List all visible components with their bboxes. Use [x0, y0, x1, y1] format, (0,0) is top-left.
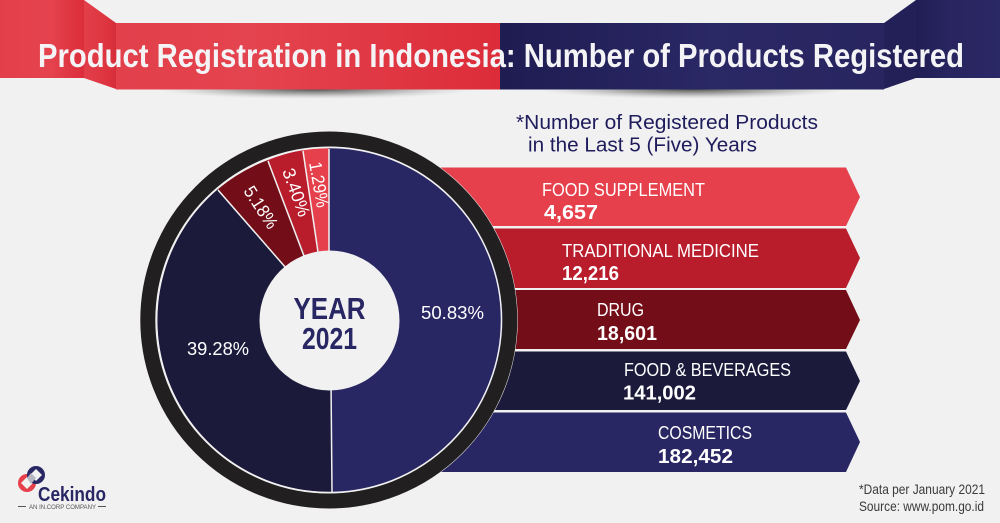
arrow: drug: 18,601 [597, 323, 657, 345]
logo mark [18, 466, 45, 492]
arrow: food supplement: 4,657 [544, 202, 598, 224]
arrow: food and beverages: FOOD & BEVERAGES [624, 360, 791, 380]
percentage labels: 5.18% [240, 182, 282, 233]
logo: Cekindo [38, 484, 106, 506]
centre label: YEAR [294, 291, 366, 326]
arrow: cosmetics [400, 412, 860, 472]
arrow: food and beverages: 141,002 [623, 382, 696, 404]
arrow: food and beverages [400, 352, 860, 410]
arrow: traditional medicine: TRADITIONAL MEDICINE [562, 241, 759, 261]
banner shadows [155, 79, 847, 99]
centre label: 2021 [302, 321, 357, 356]
slice: traditional medicine [268, 150, 330, 320]
subtitle: *Number of Registered Products [516, 111, 818, 134]
logo [18, 466, 106, 511]
arrow: food supplement: FOOD SUPPLEMENT [542, 180, 705, 200]
arrow: drug [400, 290, 860, 349]
logo: AN IN.CORP COMPANY [29, 504, 97, 511]
slice: drug [218, 160, 330, 320]
percentage labels: 39.28% [187, 339, 249, 359]
slice: food supplement [303, 148, 330, 320]
percentage labels [187, 160, 484, 359]
arrow: traditional medicine: 12,216 [562, 263, 619, 285]
slice: cosmetics [329, 148, 503, 492]
source note [859, 481, 985, 514]
dark ring [148, 139, 510, 501]
arrow: traditional medicine [400, 228, 860, 288]
slice dividers [156, 148, 502, 492]
arrow: cosmetics: 182,452 [658, 446, 733, 468]
centre hole [260, 250, 400, 390]
arrow: food supplement [400, 168, 860, 226]
subtitle [516, 111, 818, 156]
percentage labels: 3.40% [278, 166, 314, 219]
outer edge line [140, 131, 518, 509]
centre label [294, 291, 366, 356]
title banner [0, 0, 1000, 90]
arrow: cosmetics: COSMETICS [658, 423, 752, 443]
slice: food and beverages [157, 189, 332, 492]
arrow: drug: DRUG [597, 300, 644, 320]
donut chart [140, 131, 518, 509]
percentage labels: 50.83% [421, 303, 484, 323]
subtitle: in the Last 5 (Five) Years [528, 134, 757, 156]
percentage labels: 1.29% [305, 160, 333, 209]
